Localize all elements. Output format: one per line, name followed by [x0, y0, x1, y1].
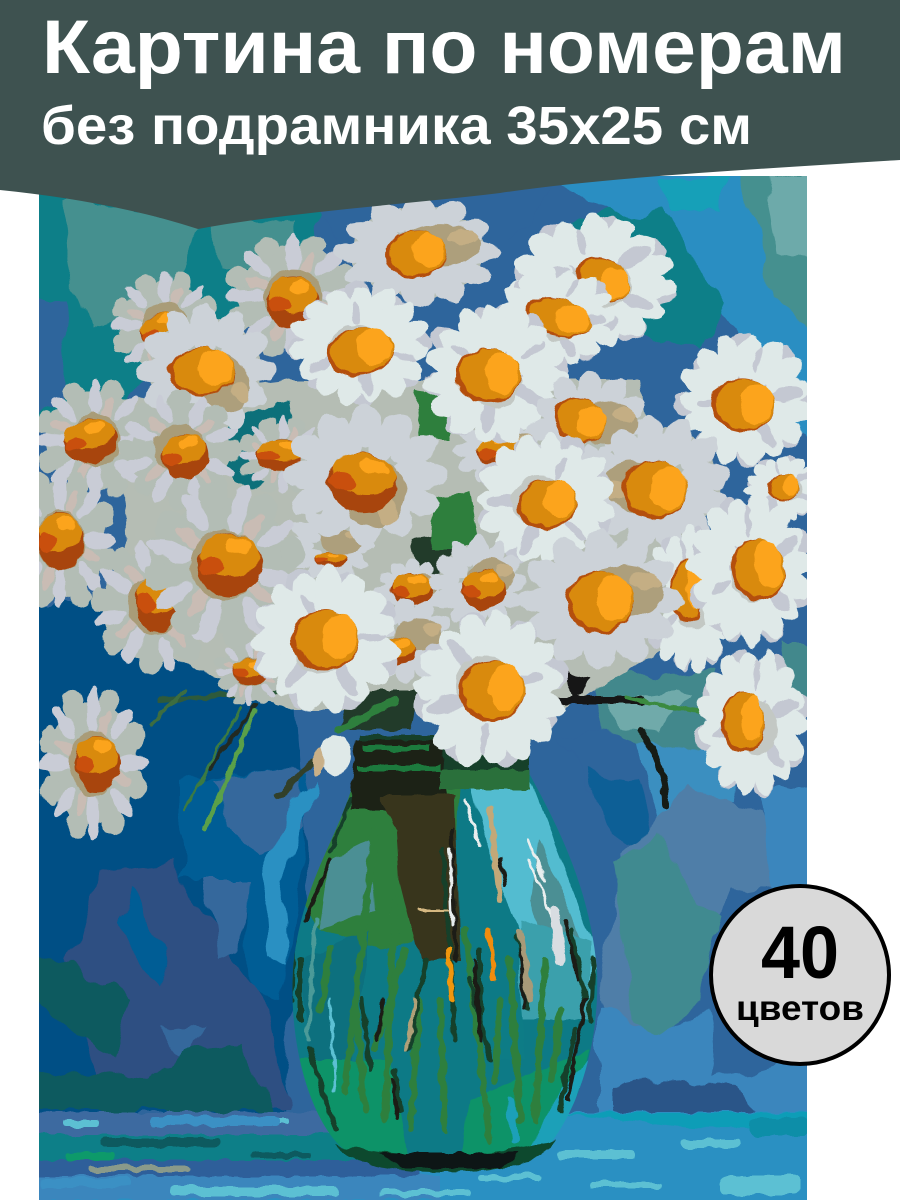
- daisy bouquet: [2, 195, 841, 841]
- vase base shadow: [335, 1140, 556, 1172]
- badge: 40 colours: [711, 886, 889, 1064]
- badge circle: [711, 886, 889, 1064]
- bud: [313, 736, 352, 776]
- badge label: цветов: [736, 989, 864, 1028]
- badge number: 40: [761, 911, 839, 994]
- painting background wall: [39, 176, 807, 1115]
- vase neck: [350, 735, 530, 830]
- banner shape: [0, 0, 900, 229]
- vase: [280, 735, 610, 1180]
- title: Картина по номерам: [42, 5, 846, 90]
- table: [20, 1112, 830, 1200]
- header banner: [0, 0, 900, 229]
- vase body: [292, 775, 598, 1154]
- painting: [39, 176, 807, 1200]
- stems and leaves: [120, 380, 700, 830]
- subtitle: без подрамника 35х25 см: [41, 96, 752, 156]
